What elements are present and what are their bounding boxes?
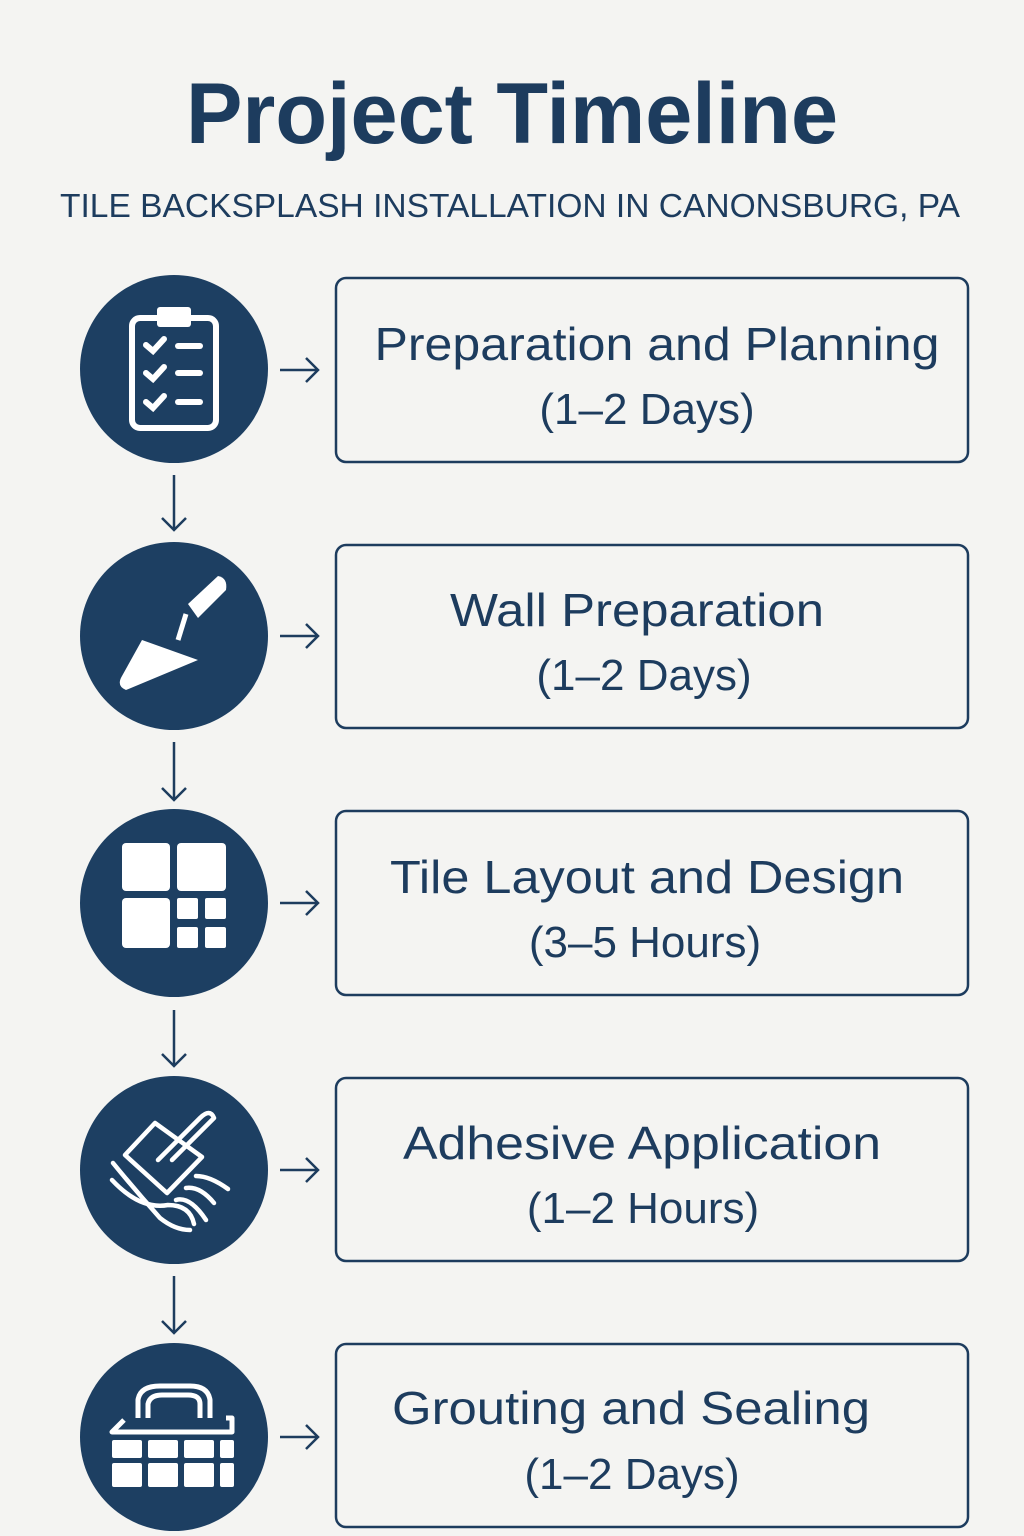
box: (3–5 Hours) (529, 918, 761, 967)
box (336, 278, 968, 462)
icon: trowel with adhesive (80, 1076, 268, 1264)
box: Wall Preparation (450, 584, 824, 636)
step 5: grouting and sealing (80, 1343, 968, 1531)
step 3: tile layout (80, 809, 968, 997)
box: (1–2 Days) (539, 385, 755, 434)
icon: grout float (80, 1343, 268, 1531)
step 4: adhesive application (80, 1076, 968, 1264)
box: Adhesive Application (403, 1117, 881, 1169)
icon: tiles (80, 809, 268, 997)
arrow right (280, 358, 318, 382)
arrow right (280, 1158, 318, 1182)
box (336, 545, 968, 728)
step 2: wall preparation (80, 542, 968, 730)
icon: clipboard (80, 275, 268, 463)
arrow down (162, 1010, 186, 1066)
arrow right (280, 891, 318, 915)
arrow right (280, 1425, 318, 1449)
box: (1–2 Days) (536, 651, 752, 700)
box: (1–2 Days) (524, 1450, 740, 1499)
icon: trowel (80, 542, 268, 730)
title: Project Timeline (186, 66, 838, 162)
box: Preparation and Planning (374, 318, 940, 370)
box: Grouting and Sealing (392, 1382, 870, 1434)
step 1: preparation and planning (80, 275, 968, 463)
subtitle: TILE BACKSPLASH INSTALLATION IN CANONSBURG, PA (60, 187, 960, 224)
box (336, 1344, 968, 1527)
arrow down (162, 742, 186, 800)
box: Tile Layout and Design (390, 851, 904, 903)
box: (1–2 Hours) (527, 1184, 759, 1233)
arrow down (162, 475, 186, 530)
box (336, 811, 968, 995)
arrow down (162, 1276, 186, 1333)
arrow right (280, 624, 318, 648)
box (336, 1078, 968, 1261)
